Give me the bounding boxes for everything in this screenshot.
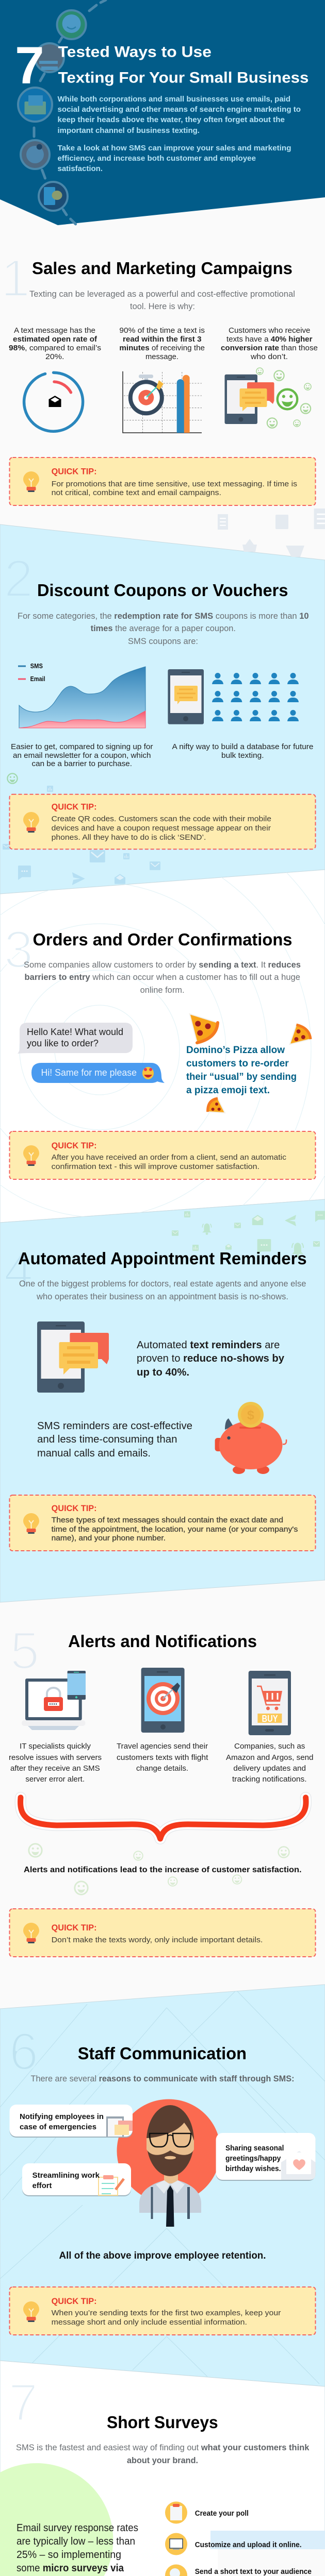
caption: IT specialists (9, 1742, 102, 1784)
ghost numeral 5: 5 (10, 1621, 39, 1680)
chart legend: Email (30, 675, 45, 683)
stat: conversion (221, 326, 318, 361)
stat: read time (119, 326, 205, 361)
text: Domino's example (186, 1044, 297, 1096)
caption: easier to get: can be a barrier to purchase. (32, 759, 132, 768)
text: Domino's example: Domino’s Pizza allow (186, 1044, 285, 1056)
step: send text: Send a short text to your audience (195, 2568, 312, 2576)
caption: easier to get (11, 742, 153, 768)
stat: read time: 90% of the time a text is (119, 326, 205, 335)
ghost smileys (29, 1844, 289, 1894)
caption: travel agencies: Travel agencies send their (117, 1742, 208, 1751)
intro text: SMS coupons are: (128, 636, 198, 646)
text: cost-effective (37, 1420, 192, 1459)
callout: quick tip 2: devices and have a coupon request message appear on their (52, 824, 271, 833)
callout: quick tip 5: QUICK TIP: (52, 1923, 97, 1933)
icon: piggy bank: $ (247, 1408, 254, 1422)
intro text: who operates their business on an appointment basis is no-shows. (36, 1292, 288, 1301)
stat: open rate: 98%, compared to email’s (9, 344, 101, 352)
ghost numeral 3: 3 (4, 920, 33, 979)
ghost numeral 2: 2 (4, 549, 33, 608)
header icon trail (18, 0, 106, 224)
caption: easier to get: Easier to get, compared to signing up for (11, 742, 153, 751)
callout: quick tip 6: message short and only include essential information. (52, 2318, 247, 2327)
intro text: One of the biggest problems for doctors, real estate agents and anyone else (19, 1279, 306, 1289)
intro text: For some categories, the redemption rate for SMS coupons is more than 10 (18, 611, 309, 621)
text: reduce no-shows (137, 1340, 285, 1378)
panel: discount coupons (3, 509, 325, 885)
callout: quick tip 6 (9, 2287, 316, 2335)
callout: quick tip 4: QUICK TIP: (52, 1504, 97, 1513)
step: upload (165, 2533, 302, 2555)
chart: 98% gauge (24, 372, 83, 431)
intro text (19, 1279, 306, 1301)
intro text: online form. (140, 985, 185, 995)
card: greetings (216, 2133, 316, 2181)
heading: staff: Staff Communication (78, 2044, 247, 2063)
header intro paragraph: social advertising and other means of search engine marketing to (58, 105, 301, 114)
intro text: about your brand. (127, 2455, 198, 2465)
heading: surveys: Short Surveys (107, 2413, 218, 2432)
brace arrow (21, 1798, 306, 1839)
callout: quick tip 2: phones. All they have to do is click ‘SEND’. (52, 834, 206, 842)
caption: database: bulk texting. (221, 751, 264, 760)
step: upload: Customize and upload it online. (195, 2541, 302, 2549)
text: Domino's example: a pizza emoji text. (186, 1084, 270, 1096)
card: emergencies (9, 2105, 133, 2138)
intro text (18, 611, 309, 646)
chat bubble: reply: Hi! Same for me please (41, 1067, 137, 1078)
panel: short surveys (0, 2373, 325, 2576)
text: cost-effective: SMS reminders are cost-effective (37, 1420, 192, 1432)
caption: companies: Amazon and Argos, send (226, 1753, 314, 1762)
section band: reminders background (0, 1199, 325, 1602)
stat: conversion: Customers who receive (229, 326, 311, 335)
chart: SMS vs email area (18, 663, 145, 728)
decorative rings (0, 873, 325, 1217)
header intro paragraph: satisfaction. (58, 164, 103, 173)
chat bubble: question (18, 1023, 133, 1054)
heading: coupons: Discount Coupons or Vouchers (37, 581, 288, 600)
caption: companies: delivery updates and (233, 1764, 306, 1773)
statement: retention: All of the above improve employee retention. (59, 2250, 266, 2261)
icon: laptop with lock (22, 1671, 86, 1730)
step: create poll: Create your poll (195, 2510, 249, 2518)
header intro paragraph: keep their heads above the water, they often forget about the (58, 115, 285, 124)
text: cost-effective: manual calls and emails. (37, 1448, 151, 1459)
decorative triangles (0, 1990, 325, 2384)
callout: quick tip 6: QUICK TIP: (52, 2297, 97, 2306)
intro text: barriers to entry which can occur when a customer has to fill out a huge (25, 972, 300, 982)
header title (58, 44, 308, 87)
icon: pizza slices (190, 1014, 311, 1113)
icon: love emoji (142, 1067, 154, 1079)
caption: IT specialists: IT specialists quickly (20, 1742, 91, 1751)
ghost numeral 6: 6 (9, 2022, 38, 2081)
caption: IT specialists: server error alert. (25, 1775, 85, 1784)
callout: quick tip 2 (9, 794, 316, 849)
text: reduce no-shows: Automated text reminders are (137, 1340, 280, 1351)
heading: reminders: Automated Appointment Reminders (18, 1249, 307, 1268)
caption: companies: tracking notifications. (232, 1775, 307, 1784)
ghost numeral 4: 4 (4, 1241, 33, 1299)
caption: travel agencies: customers texts with flight (117, 1753, 208, 1762)
icon: piggy bank (215, 1402, 286, 1474)
stat: open rate: A text message has the (14, 326, 95, 335)
caption: database: A nifty way to build a database for future (172, 742, 314, 751)
header panel (0, 0, 325, 225)
callout: quick tip 3: After you have received an order from a client, send an automatic (52, 1154, 286, 1162)
card: greetings: greetings/happy (225, 2155, 281, 2163)
stat: read time: minutes of receiving the (119, 344, 205, 352)
intro text (24, 960, 301, 995)
stat: conversion: conversion rate than those (221, 344, 318, 352)
text: response rates: are typically low – less than (17, 2536, 135, 2547)
intro text: times the average for a paper coupon. (91, 623, 236, 633)
ghost icons green (172, 1211, 325, 1257)
text: response rates: 25% – so implementing (17, 2549, 121, 2561)
callout: quick tip 3: confirmation text - this will improve customer satisfaction. (52, 1163, 259, 1171)
callout: quick tip 4 (9, 1495, 316, 1551)
header intro paragraph: important channel of business texting. (58, 126, 200, 135)
heading: orders: Orders and Order Confirmations (33, 930, 292, 949)
ghost numeral 7: 7 (9, 2373, 38, 2432)
heading: sales: Sales and Marketing Campaigns (32, 259, 293, 278)
icon: phone with cart (249, 1671, 291, 1735)
text: reduce no-shows: up to 40%. (137, 1367, 189, 1378)
stat: open rate: estimated open rate of (13, 335, 98, 344)
callout: quick tip 2: Create QR codes. Customers scan the code with their mobile (52, 815, 271, 823)
stat: read time: read within the first 3 (123, 335, 201, 344)
chart legend: SMS (30, 663, 43, 670)
green circle backdrop (0, 2463, 113, 2576)
header numeral 7: 7 (15, 36, 44, 95)
panel: sales and marketing (1, 249, 318, 505)
callout: quick tip 3 (9, 1131, 316, 1179)
step: send text (165, 2565, 312, 2576)
icon: phone with chat bubbles and smileys (225, 368, 311, 428)
header title: Tested Ways to Use (58, 44, 212, 61)
text: response rates: some micro surveys via (17, 2563, 124, 2574)
caption: companies (226, 1742, 314, 1784)
callout: quick tip 1 (9, 457, 316, 505)
illustration: bearded employee (117, 2099, 221, 2227)
step: create poll (165, 2502, 249, 2523)
section band: surveys background (0, 2361, 325, 2576)
stat: read time: message. (145, 352, 178, 361)
chat bubble: question: you like to order? (27, 1038, 99, 1048)
chart legend (18, 663, 45, 683)
panel: staff communication (0, 1990, 325, 2384)
card: greetings: Sharing seasonal (225, 2144, 284, 2153)
header intro paragraph: Take a look at how SMS can improve your sales and marketing (58, 144, 291, 152)
section band: coupons background (0, 524, 325, 894)
icon: phone with cart: BUY (262, 1714, 278, 1724)
header title: Texting For Your Small Business (58, 70, 308, 87)
card: emergencies: Notifying employees in (20, 2113, 104, 2121)
chart: target and bars (123, 371, 202, 433)
caption: easier to get: an email newsletter for a coupon, which (13, 751, 151, 760)
icon: phone with target (141, 1668, 185, 1733)
card: streamlining: Streamlining work (32, 2172, 100, 2180)
text: response rates: Email survey response rates (17, 2522, 138, 2534)
intro text: SMS is the fastest and easiest way of finding out what your customers think (16, 2443, 310, 2452)
intro text: tool. Here is why: (130, 301, 195, 311)
caption: database (172, 742, 314, 760)
card: greetings: birthday wishes. (225, 2165, 281, 2173)
callout: quick tip 2: QUICK TIP: (52, 803, 97, 812)
stat: open rate: 20%. (45, 352, 64, 361)
chat bubble: question: Hello Kate! What would (27, 1026, 123, 1037)
intro text (16, 2443, 310, 2465)
text: Domino's example: customers to re-order (186, 1058, 289, 1069)
ghost chart backdrop (210, 2531, 325, 2576)
ghost numeral 1: 1 (1, 249, 30, 308)
ghost icons above divider (218, 509, 325, 557)
caption: travel agencies (117, 1742, 208, 1773)
text: reduce no-shows: proven to reduce no-shows by (137, 1353, 285, 1364)
callout: quick tip 1: QUICK TIP: (52, 467, 97, 477)
callout: quick tip 5 (9, 1909, 316, 1957)
header intro paragraph: While both corporations and small businesses use emails, paid (58, 95, 290, 104)
caption: travel agencies: change details. (136, 1764, 188, 1773)
intro text (29, 289, 295, 311)
caption: companies: Companies, such as (234, 1742, 305, 1751)
callout: quick tip 3: QUICK TIP: (52, 1141, 97, 1150)
callout: quick tip 4: These types of text messages should contain the exact date and (52, 1516, 283, 1524)
panel: appointment reminders (4, 1211, 325, 1551)
caption: IT specialists: after they receive an SMS (10, 1764, 100, 1773)
card: streamlining: effort (32, 2182, 52, 2190)
caption: IT specialists: resolve issues with servers (9, 1753, 102, 1762)
section band: orders background (0, 870, 325, 1223)
stat: conversion: who don’t. (250, 352, 288, 361)
ghost message icons (3, 773, 160, 885)
statement: satisfaction: Alerts and notifications lead to the increase of customer satisfaction. (24, 1866, 302, 1874)
callout: quick tip 1: For promotions that are time sensitive, use text messaging. If time is (52, 480, 297, 488)
card: streamlining (22, 2163, 131, 2196)
chat bubble: reply (31, 1063, 165, 1083)
intro text: Texting can be leveraged as a powerful and cost-effective promotional (29, 289, 295, 299)
icon: phone with chat bubbles (37, 1321, 109, 1393)
panel: orders (0, 873, 325, 1217)
callout: quick tip 4: name), and your phone number. (52, 1534, 166, 1543)
intro text: Some companies allow customers to order by sending a text. It reduces (24, 960, 301, 970)
section band: staff background (0, 1985, 325, 2386)
intro text: There are several reasons to communicate with staff through SMS: (31, 2074, 294, 2083)
stat: open rate (9, 326, 101, 361)
card: emergencies: case of emergencies (20, 2123, 96, 2131)
text: response rates (17, 2522, 138, 2576)
text: Domino's example: their “usual” by sending (186, 1071, 297, 1082)
callout: quick tip 1: not critical, combine text and email campaigns. (52, 489, 221, 497)
heading: alerts: Alerts and Notifications (68, 1632, 257, 1651)
text: cost-effective: and less time-consuming than (37, 1434, 177, 1445)
icon: phone and subscriber grid (168, 669, 299, 724)
panel: alerts and notifications (9, 1621, 316, 1957)
stat: conversion: texts have a 40% higher (226, 335, 313, 344)
callout: quick tip 4: time of the appointment, the location, your name (or your company's (52, 1526, 298, 1534)
header intro paragraph (58, 95, 301, 173)
header intro paragraph: efficiency, and increase both customer and employee (58, 154, 256, 163)
callout: quick tip 6: When you’re sending texts for the first two examples, keep your (52, 2309, 281, 2317)
callout: quick tip 5: Don’t make the texts wordy, only include important details. (52, 1936, 263, 1944)
